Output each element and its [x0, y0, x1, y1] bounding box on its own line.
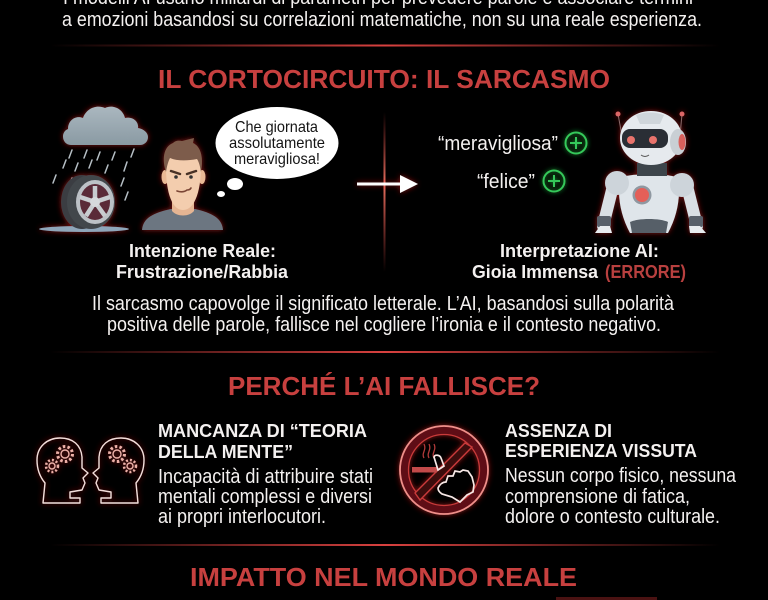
icon: flat tyre — [39, 175, 129, 232]
right caption: interpretazione AI: Interpretazione AI: — [500, 241, 659, 261]
sarcasm explanation: Il sarcasmo capovolge il significato letterale. L’AI, basandosi sulla polarità — [92, 293, 675, 315]
text block: teoria della mente: MANCANZA DI “TEORIA — [158, 421, 367, 441]
text block: esperienza vissuta: comprensione di fatica, — [505, 486, 690, 508]
heading: perché l'AI fallisce: PERCHÉ L’AI FALLISCE? — [228, 371, 540, 401]
text block: esperienza vissuta — [505, 421, 737, 528]
left caption: intenzione reale: Frustrazione/Rabbia — [116, 262, 289, 282]
arrow — [357, 175, 418, 193]
right caption: interpretazione AI — [472, 241, 686, 282]
speech bubble: assolutamente — [229, 135, 325, 152]
text block: teoria della mente: mentali complessi e diversi — [158, 486, 372, 508]
positive word tags: “meravigliosa” — [438, 133, 558, 155]
text block: esperienza vissuta: Nessun corpo fisico, nessuna — [505, 465, 737, 487]
heading: impatto nel mondo reale: IMPATTO NEL MONDO REALE — [190, 562, 577, 592]
speech bubble: Che giornata — [235, 119, 318, 136]
right caption: interpretazione AI: Gioia Immensa — [472, 262, 599, 282]
text block: teoria della mente — [158, 421, 373, 528]
heading: il cortocircuito: IL CORTOCIRCUITO: IL SARCASMO — [158, 64, 610, 94]
text block: esperienza vissuta: ESPERIENZA VISSUTA — [505, 441, 697, 461]
positive word tags: “felice” — [477, 171, 535, 193]
icon: frustrated man — [142, 138, 223, 230]
left caption: intenzione reale — [116, 241, 289, 282]
text block: teoria della mente: Incapacità di attribuire stati — [158, 466, 373, 488]
right caption: interpretazione AI: (ERRORE) — [605, 262, 686, 282]
speech bubble: meravigliosa! — [234, 151, 320, 168]
icon: two heads with gears — [37, 438, 144, 503]
text block: esperienza vissuta: dolore o contesto culturale. — [505, 506, 720, 528]
speech bubble — [216, 107, 338, 197]
text block: esperienza vissuta: ASSENZA DI — [505, 421, 612, 441]
sarcasm explanation: positiva delle parole, fallisce nel cogliere l’ironia e il contesto negativo. — [107, 314, 661, 336]
positive word tags — [438, 132, 586, 193]
icon: no cigarette / hand prohibited — [400, 426, 488, 514]
left caption: intenzione reale: Intenzione Reale: — [129, 241, 276, 261]
icon: robot — [595, 111, 706, 233]
sarcasm explanation — [92, 293, 675, 336]
intro text — [62, 0, 702, 31]
intro text: a emozioni basandosi su correlazioni matematiche, non su una reale esperienza. — [62, 9, 702, 31]
text block: teoria della mente: DELLA MENTE” — [158, 442, 293, 462]
icon: rain cloud — [53, 107, 148, 200]
text block: teoria della mente: ai propri interlocutori. — [158, 506, 326, 528]
